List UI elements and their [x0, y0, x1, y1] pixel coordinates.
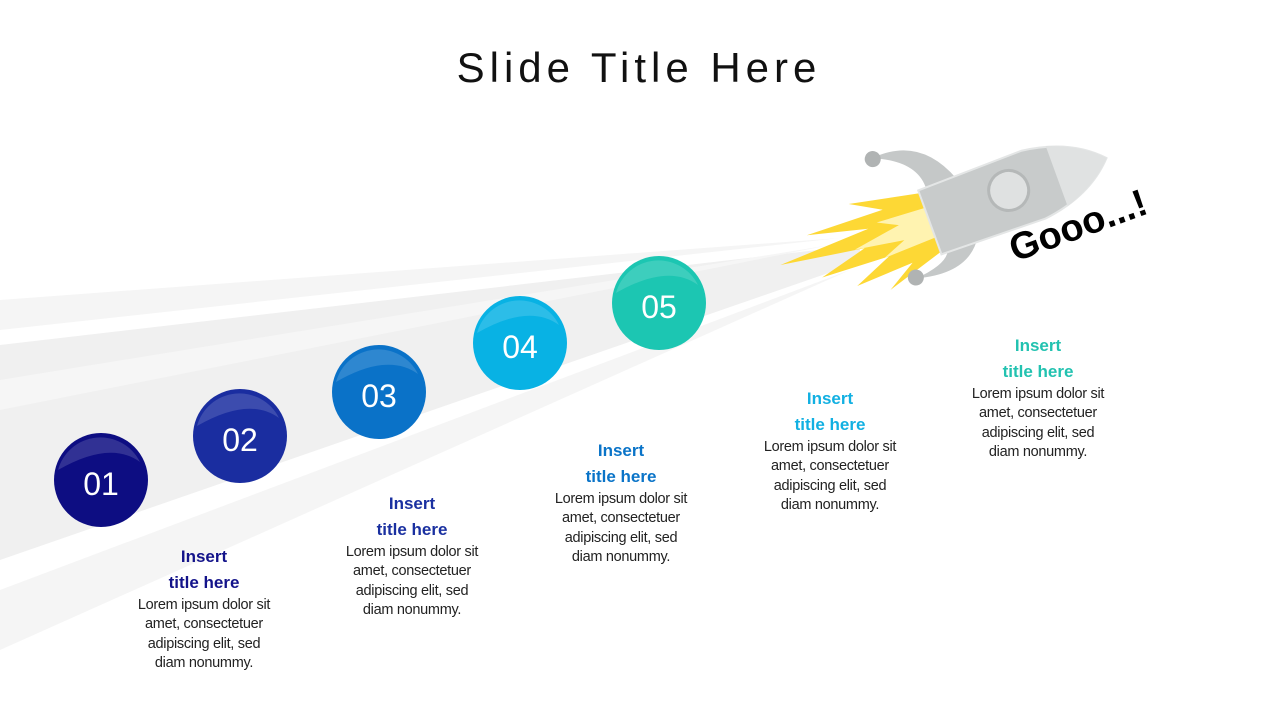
flame	[769, 178, 952, 322]
text block 1: title here	[169, 573, 239, 592]
text block 2: Insert	[389, 494, 435, 513]
text block 3	[555, 441, 688, 565]
text block 2: amet, consectetuer	[353, 563, 471, 579]
text block 1: adipiscing elit, sed	[148, 636, 260, 652]
text block 2: adipiscing elit, sed	[356, 583, 468, 599]
fins	[872, 133, 956, 203]
text block 2: Lorem ipsum dolor sit	[346, 544, 478, 560]
text block 4: adipiscing elit, sed	[774, 478, 886, 494]
circle 01: 01	[83, 466, 119, 502]
text block 3: title here	[586, 467, 656, 486]
circle 02	[193, 389, 287, 483]
title: Slide Title Here	[457, 44, 821, 91]
circle 03	[332, 345, 426, 439]
text block 5: title here	[1003, 362, 1073, 381]
circle 05	[612, 256, 706, 350]
text block 1: diam nonummy.	[155, 655, 253, 671]
text block 3: adipiscing elit, sed	[565, 530, 677, 546]
text block 4: diam nonummy.	[781, 497, 879, 513]
text block 1: amet, consectetuer	[145, 616, 263, 632]
Gooo text: Gooo...!	[1004, 182, 1153, 270]
text block 2: diam nonummy.	[363, 602, 461, 618]
text block 5: amet, consectetuer	[979, 405, 1097, 421]
text block 2: title here	[377, 520, 447, 539]
circle 04	[473, 296, 567, 390]
text block 3: Insert	[598, 441, 644, 460]
circle 05: 05	[641, 289, 677, 325]
text block 4: amet, consectetuer	[771, 458, 889, 474]
text block 5	[972, 336, 1104, 460]
rocket	[754, 76, 1125, 327]
text block 1	[138, 547, 270, 671]
text block 4	[764, 389, 896, 513]
speed streaks	[0, 238, 860, 650]
text block 3: amet, consectetuer	[562, 510, 680, 526]
text block 5: Insert	[1015, 336, 1061, 355]
text block 5: diam nonummy.	[989, 444, 1087, 460]
body	[918, 124, 1119, 256]
text block 2	[346, 494, 478, 618]
circle 02: 02	[222, 422, 258, 458]
text block 4: title here	[795, 415, 865, 434]
circle 01	[54, 433, 148, 527]
text block 4: Insert	[807, 389, 853, 408]
text block 1: Lorem ipsum dolor sit	[138, 597, 270, 613]
text block 5: Lorem ipsum dolor sit	[972, 386, 1104, 402]
text block 4: Lorem ipsum dolor sit	[764, 439, 896, 455]
text block 5: adipiscing elit, sed	[982, 425, 1094, 441]
text block 3: diam nonummy.	[572, 549, 670, 565]
circle 03: 03	[361, 378, 397, 414]
circle 04: 04	[502, 329, 538, 365]
text block 3: Lorem ipsum dolor sit	[555, 491, 687, 507]
text block 1: Insert	[181, 547, 227, 566]
